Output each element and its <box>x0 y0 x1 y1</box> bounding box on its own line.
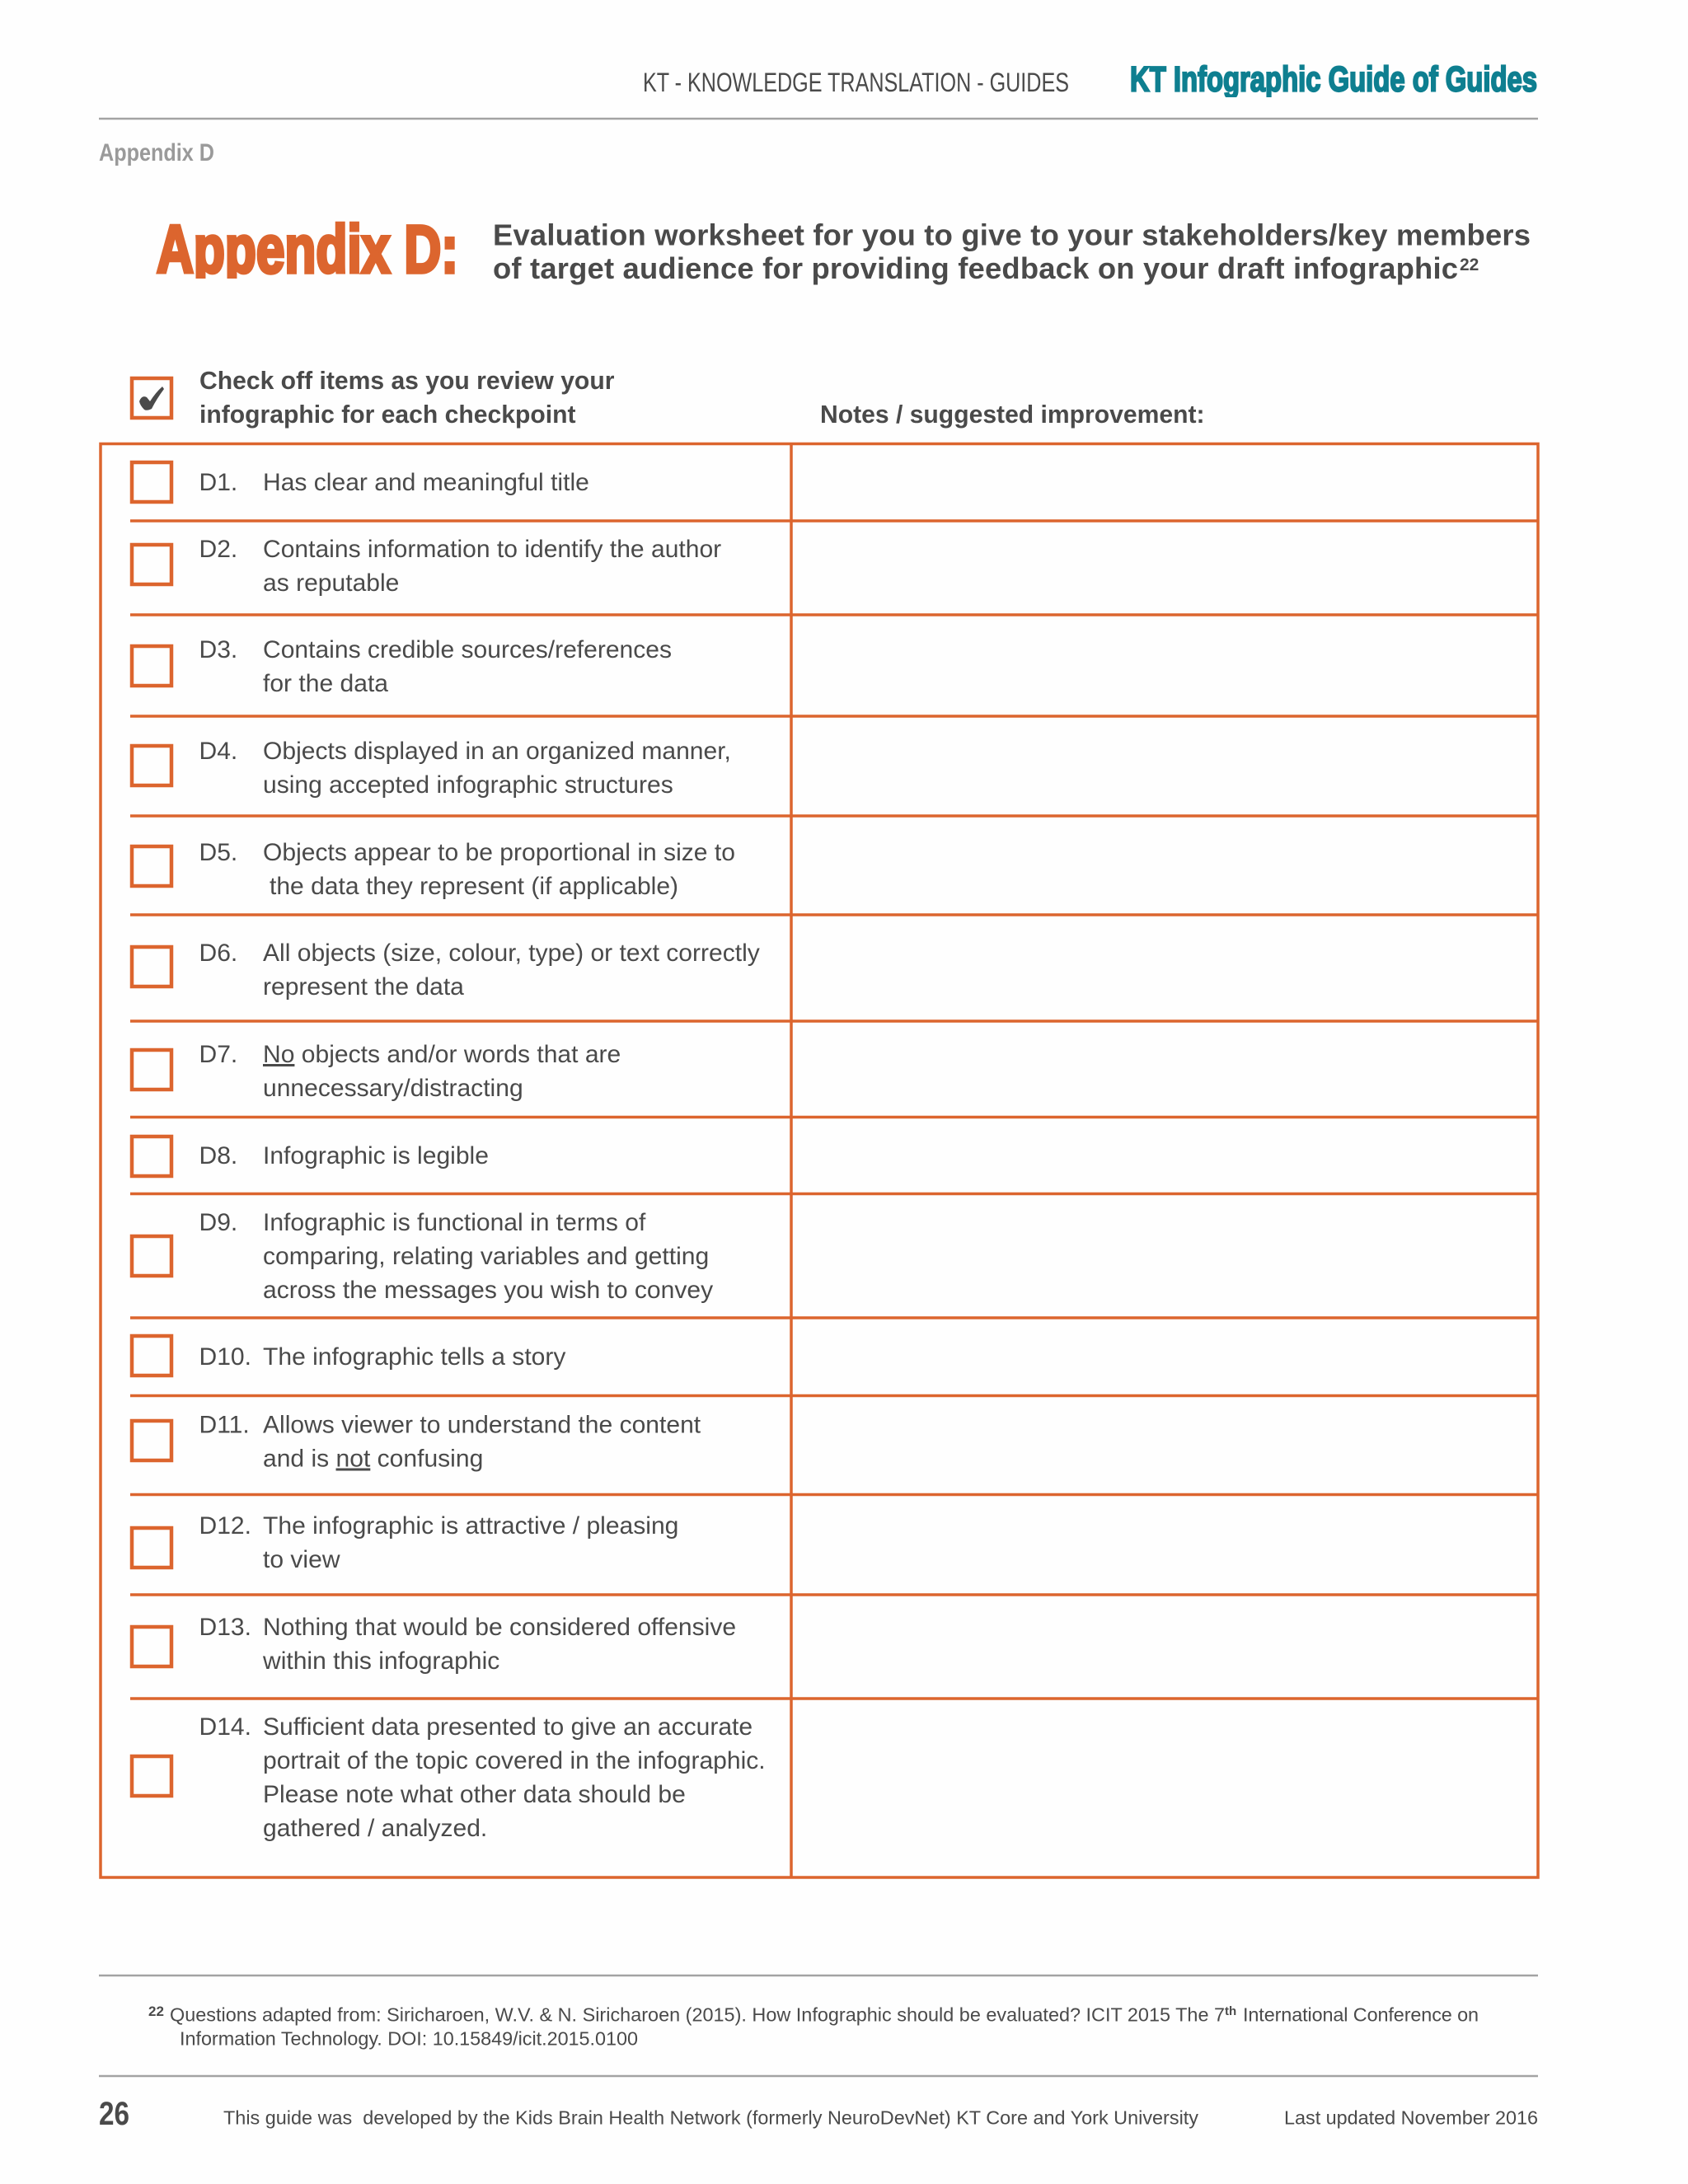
row D6: D6. <box>199 940 237 967</box>
row D12: The infographic is attractive / pleasing <box>263 1512 678 1540</box>
column header: checklist instructions <box>132 368 615 429</box>
row D13: within this infographic <box>262 1647 499 1675</box>
row D14: Please note what other data should be <box>263 1781 686 1808</box>
row D13: Nothing that would be considered offensive <box>263 1614 736 1641</box>
row D6 <box>132 940 760 1001</box>
row D5: the data they represent (if applicable) <box>270 873 678 900</box>
row D3 <box>132 636 672 697</box>
instructions text: infographic for each checkpoint <box>199 401 575 429</box>
row D4 <box>132 738 731 799</box>
row D7: unnecessary/distracting <box>263 1075 523 1102</box>
footnote <box>99 1975 1538 2049</box>
row D14 <box>132 1713 766 1842</box>
row D11: Allows viewer to understand the content <box>263 1411 701 1439</box>
row D5: D5. <box>199 839 237 866</box>
row D2 <box>132 536 721 597</box>
footnote: International Conference on <box>1243 2004 1479 2026</box>
row D11 <box>132 1411 701 1472</box>
row D11: and is not confusing <box>263 1446 483 1472</box>
row D12: to view <box>263 1546 340 1573</box>
column header: notes: Notes / suggested improvement: <box>820 401 1205 429</box>
row D8: Infographic is legible <box>263 1142 489 1169</box>
row D8: D8. <box>199 1142 237 1169</box>
row D13: D13. <box>199 1614 251 1641</box>
instructions text <box>199 368 615 429</box>
guide title: KT Infographic Guide of Guides <box>1130 59 1537 99</box>
row D7 <box>132 1041 621 1102</box>
row D4: D4. <box>199 738 237 765</box>
row D12 <box>132 1512 678 1573</box>
row D6: represent the data <box>263 973 464 1001</box>
footnote: Information Technology. DOI: 10.15849/icit.2015.0100 <box>180 2027 638 2049</box>
title block <box>156 221 1530 285</box>
row D6: All objects (size, colour, type) or text correctly <box>263 940 760 967</box>
page header <box>99 59 1538 119</box>
row D9: D9. <box>199 1209 237 1236</box>
page number: 26 <box>99 2096 129 2132</box>
row D14: portrait of the topic covered in the infographic. <box>263 1747 766 1774</box>
row D10: D10. <box>199 1343 251 1371</box>
footnote: Questions adapted from: Siricharoen, W.V. & N. Siricharoen (2015). How Infographic should be evaluated? ICIT 2015 The 7 <box>170 2004 1225 2026</box>
row D5: Objects appear to be proportional in size to <box>263 839 735 866</box>
row D2: D2. <box>199 536 237 563</box>
table frame <box>101 443 1538 1877</box>
row D14: D14. <box>199 1713 251 1741</box>
footnote: th <box>1225 2004 1236 2018</box>
row D14: gathered / analyzed. <box>263 1815 487 1842</box>
row D3: for the data <box>263 670 388 697</box>
row D9: comparing, relating variables and getting <box>263 1243 709 1270</box>
row D1 <box>132 462 589 502</box>
row D10: The infographic tells a story <box>263 1343 565 1371</box>
subtitle: of target audience for providing feedback on your draft infographic <box>493 251 1458 285</box>
row D11: D11. <box>199 1411 250 1439</box>
row D1: Has clear and meaningful title <box>263 469 589 496</box>
row D14: Sufficient data presented to give an accurate <box>263 1713 753 1741</box>
row D9: across the messages you wish to convey <box>263 1277 713 1304</box>
last updated: Last updated November 2016 <box>1284 2107 1538 2128</box>
row D8 <box>132 1137 489 1176</box>
row D4: using accepted infographic structures <box>263 771 673 799</box>
header label: KT - KNOWLEDGE TRANSLATION - GUIDES <box>643 68 1069 97</box>
title: Appendix D: Appendix D: <box>157 213 458 287</box>
row D12: D12. <box>199 1512 251 1540</box>
row D9 <box>132 1209 713 1304</box>
checklist table <box>101 443 1538 1877</box>
subtitle: 22 <box>1460 255 1479 274</box>
row D13 <box>132 1614 736 1675</box>
subtitle <box>493 218 1531 285</box>
row D7: No objects and/or words that are <box>263 1041 621 1068</box>
credit line: This guide was developed by the Kids Brain Health Network (formerly NeuroDevNet) KT Core and York University <box>223 2107 1198 2128</box>
icon: checked box <box>132 378 171 418</box>
footnote: 22 <box>148 2004 164 2019</box>
page footer <box>99 2076 1538 2132</box>
subtitle: Evaluation worksheet for you to give to your stakeholders/key members <box>493 218 1531 252</box>
row D4: Objects displayed in an organized manner, <box>263 738 731 765</box>
row D7: D7. <box>199 1041 237 1068</box>
row D2: Contains information to identify the author <box>263 536 721 563</box>
instructions text: Check off items as you review your <box>199 368 615 395</box>
row D3: Contains credible sources/references <box>263 636 672 663</box>
row D3: D3. <box>199 636 237 663</box>
section label: Appendix D <box>99 139 214 166</box>
row D2: as reputable <box>263 569 399 597</box>
row D5 <box>132 839 735 900</box>
row D1: D1. <box>199 469 237 496</box>
row D9: Infographic is functional in terms of <box>263 1209 646 1236</box>
row D10 <box>132 1336 565 1376</box>
